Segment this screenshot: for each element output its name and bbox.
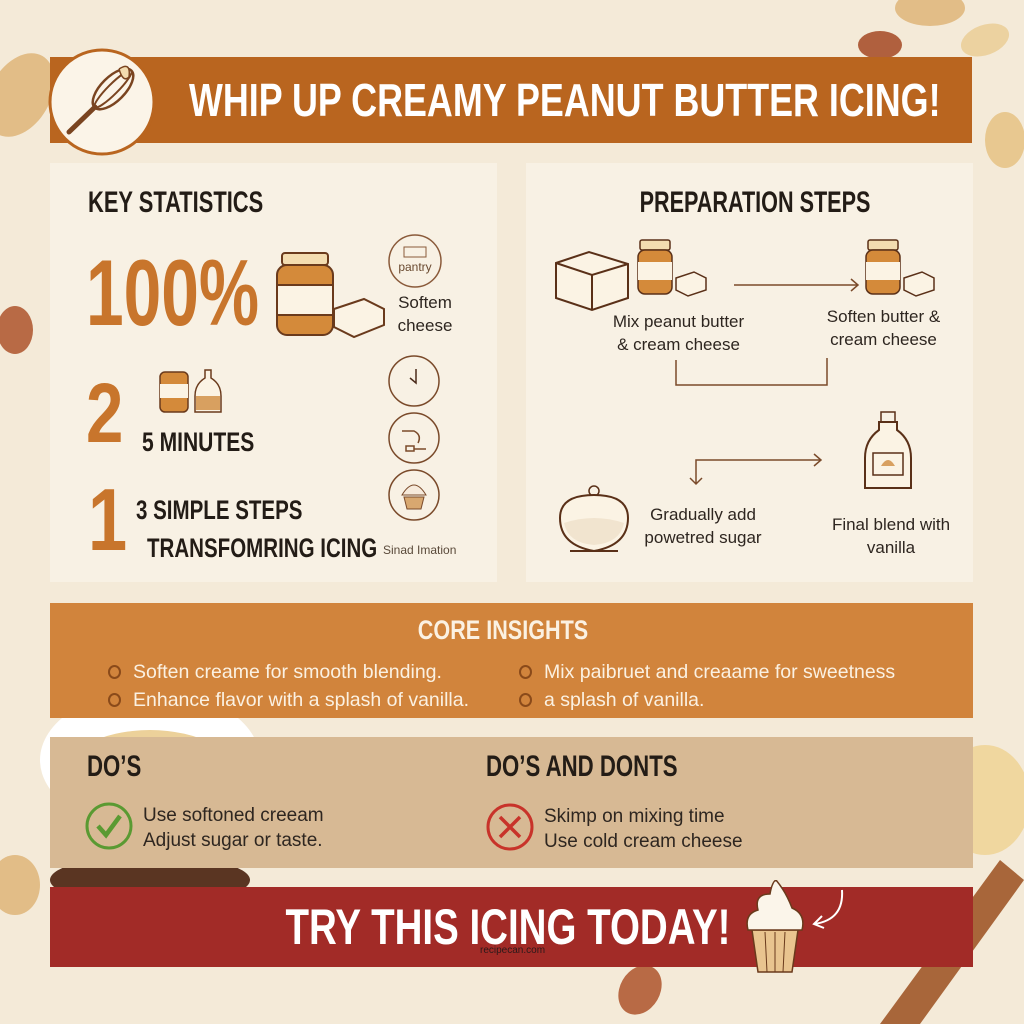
bullets left (108, 661, 469, 711)
cta text: TRY THIS ICING TODAY! (286, 899, 730, 955)
icon: cupcake (746, 880, 844, 973)
icon: pantry circle (388, 234, 442, 288)
website text: recipecan.com (480, 945, 545, 956)
connector bracket (675, 358, 828, 386)
arrow (814, 890, 842, 928)
panel: key statistics (50, 163, 497, 582)
text: transforming icing: TRANSFOMRING ICING (147, 533, 377, 563)
text: soften cheese: Softem cheese (398, 293, 452, 335)
bullets right: a splash of vanilla. (544, 689, 704, 711)
bullets left: Soften creame for smooth blending. (133, 661, 442, 683)
icon: sugar bowl (559, 485, 629, 552)
heading: KEY STATISTICS (88, 186, 263, 219)
call to action bar (50, 887, 973, 967)
icon: pantry circle: pantry (398, 260, 432, 274)
text: step 2: Soften butter & cream cheese (827, 307, 940, 349)
stat 100%: 100% (86, 240, 259, 345)
icon: whisk (48, 48, 152, 156)
small text: Sinad Imation (383, 543, 456, 557)
icon: jar and bottle (159, 369, 222, 413)
heading: dos and donts: DO’S AND DONTS (486, 750, 678, 783)
panel: preparation steps (526, 163, 973, 582)
header bar (50, 57, 972, 143)
icons: cheese, jar, cube (555, 239, 707, 311)
icon: vanilla bottle (864, 411, 912, 489)
text: 3 simple steps: 3 SIMPLE STEPS (136, 495, 302, 525)
stat 2: 2 (86, 366, 123, 460)
icon: check (86, 802, 132, 850)
text: step 1: Mix peanut butter & cream cheese (613, 312, 744, 354)
bullets left: Enhance flavor with a splash of vanilla. (133, 689, 469, 711)
bullets right: Mix paibruet and creaame for sweetness (544, 661, 895, 683)
arrow: bottom (690, 454, 822, 485)
stat 1: 1 (88, 470, 127, 569)
text: donts list (544, 806, 743, 852)
panel: dos and donts (50, 737, 973, 868)
icon: jar and cube right (865, 239, 935, 297)
text: step 3: Gradually add powetred sugar (644, 505, 762, 547)
text: donts list: Use cold cream cheese (544, 831, 743, 852)
heading: dos: DO’S (87, 750, 141, 783)
arrow: top right (734, 278, 859, 292)
heading: PREPARATION STEPS (640, 186, 870, 219)
heading: CORE INSIGHTS (418, 615, 588, 645)
title: WHIP UP CREAMY PEANUT BUTTER ICING! (189, 74, 941, 126)
bullets right (519, 661, 895, 711)
text: 5 minutes: 5 MINUTES (142, 427, 254, 457)
icon: jar and cheese (276, 252, 385, 338)
text: dos list: Use softoned creeam (143, 805, 324, 826)
icons: clock, steps, cupcake circles (388, 355, 440, 521)
icon: cross (486, 804, 534, 850)
text: dos list: Adjust sugar or taste. (143, 830, 323, 851)
text: donts list: Skimp on mixing time (544, 806, 725, 827)
text: dos list (143, 805, 324, 851)
panel: core insights (50, 603, 973, 718)
text: step 4: Final blend with vanilla (832, 515, 950, 557)
